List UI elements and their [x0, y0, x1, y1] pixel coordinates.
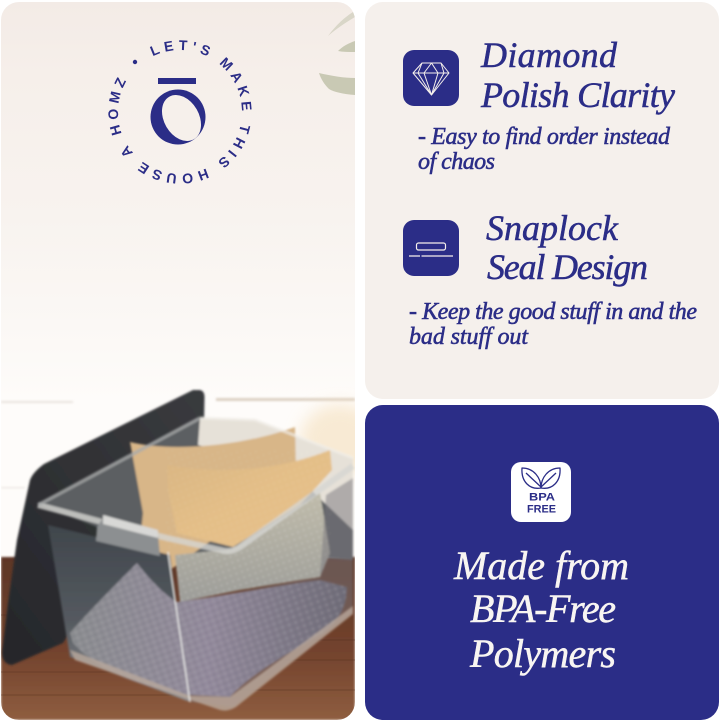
text: keep the good stuff: - Keep the good stuff in and the: [409, 299, 697, 325]
icon: diamond: [403, 50, 459, 106]
text: easy to find order: of chaos: [418, 149, 495, 175]
box rim front: [38, 466, 353, 551]
wooden floor: [1, 557, 355, 720]
text: keep the good stuff: bad stuff out: [409, 324, 529, 350]
storage lid: [2, 390, 205, 665]
features background: [365, 2, 719, 399]
pillow back: [130, 427, 296, 570]
logo bar: [158, 78, 196, 84]
box front panel: [48, 525, 190, 702]
heading: Made from BPA-Free Polymers: BPA-Free: [470, 586, 616, 631]
plant leaves: [319, 12, 355, 95]
logo: brand seal: [108, 40, 252, 184]
heading: Diamond Polish Clarity: Diamond: [480, 35, 618, 75]
clear storage box: [38, 418, 353, 711]
icon: BPA free leaves: [511, 462, 571, 522]
icon: snaplock seal: [403, 220, 459, 276]
icon: BPA free leaves: FREE: [527, 504, 556, 516]
logo ring: [150, 88, 209, 148]
box handle: [96, 515, 160, 556]
box rim back: [38, 418, 200, 505]
box interior: [40, 418, 353, 560]
icon: BPA free leaves: BPA: [529, 492, 555, 504]
wall trim: [1, 398, 355, 488]
wall background: [1, 2, 355, 356]
pillow front: [167, 450, 332, 547]
heading: Made from BPA-Free Polymers: Polymers: [469, 631, 616, 676]
circular tagline: LET'S MAKE THIS HOUSE A HOMZ: [108, 40, 252, 184]
text: keep the good stuff: [409, 299, 697, 350]
corner seam: [168, 552, 190, 702]
heading: Snaplock Seal Design: Seal Design: [487, 247, 648, 287]
warm wall glow: [296, 402, 355, 478]
heading: Snaplock Seal Design: [486, 208, 648, 287]
heading: Diamond Polish Clarity: [480, 35, 675, 115]
folded blanket: [70, 563, 347, 697]
seal dot: [133, 60, 137, 64]
lower pillow seen through box: [175, 493, 330, 602]
heading: Made from BPA-Free Polymers: Made from: [453, 543, 629, 588]
box right wall: [178, 478, 353, 707]
box bottom: [70, 606, 353, 711]
panel: features: [365, 2, 719, 399]
heading: Snaplock Seal Design: Snaplock: [486, 208, 619, 248]
heading: Diamond Polish Clarity: Polish Clarity: [480, 75, 675, 115]
panel: product photo: [1, 2, 380, 720]
BPA background: [365, 405, 719, 720]
panel: BPA free: [365, 405, 719, 720]
heading: Made from BPA-Free Polymers: [453, 543, 629, 676]
text: easy to find order: [418, 124, 671, 175]
text: easy to find order: - Easy to find order instead: [418, 124, 671, 150]
